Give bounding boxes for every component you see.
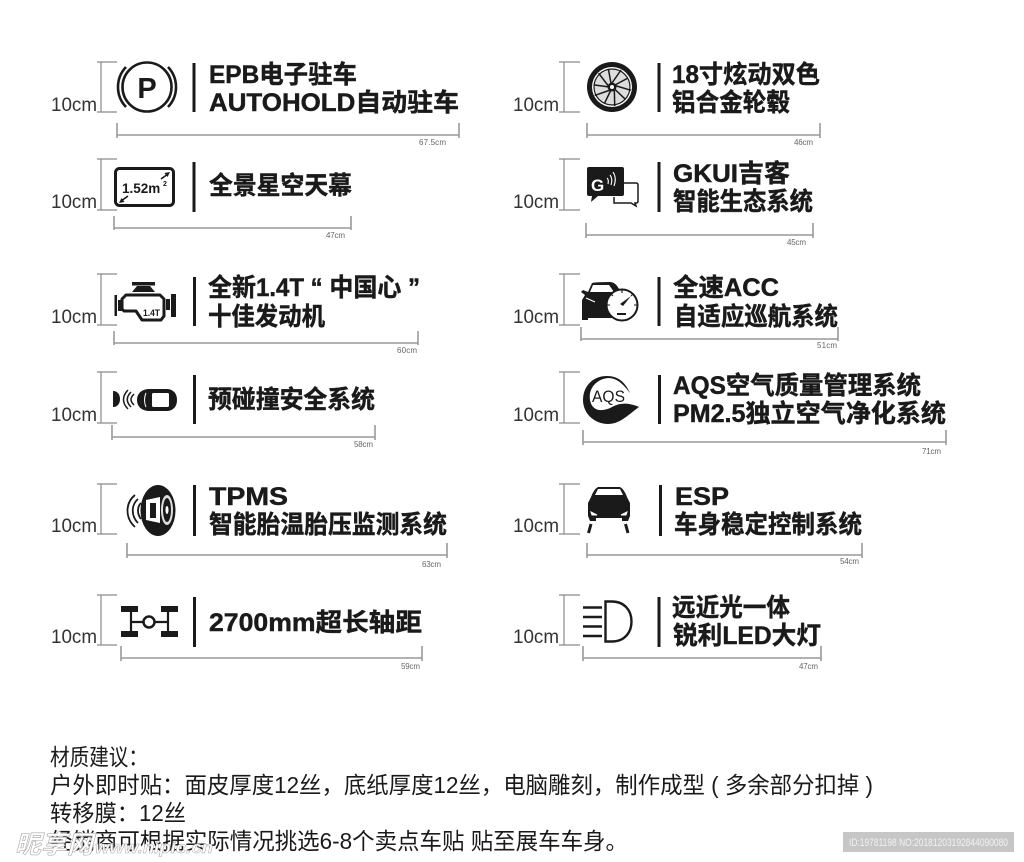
- text: EPB heading: EPB电子驻车: [209, 61, 357, 89]
- panel: ESP sticker: 10cm: [513, 515, 559, 537]
- panel: wheelbase sticker: 10cm: [51, 626, 97, 648]
- panel: TPMS sticker: 63cm: [422, 560, 441, 569]
- panel: GKUI sticker: 10cm: [513, 191, 559, 213]
- panel: pre-collision sticker: 10cm: [51, 404, 97, 426]
- panel: headlight sticker: 47cm: [799, 662, 818, 671]
- panel: EPB sticker: 67.5cm: [419, 138, 446, 147]
- icon: engine: 1.4T: [143, 308, 160, 318]
- text: AQS heading: PM2.5独立空气净化系统: [673, 400, 946, 428]
- panel: ESP sticker: [513, 483, 862, 566]
- watermark: site logo: 昵享网: [15, 831, 97, 859]
- panel: headlight sticker: [513, 594, 821, 671]
- text: ESP heading: 车身稳定控制系统: [674, 511, 862, 539]
- panel: panoramic sunroof sticker: 10cm: [51, 191, 97, 213]
- icon: car with collision radar: [113, 389, 177, 411]
- panel: ESP sticker: 54cm: [840, 557, 859, 566]
- text: TPMS heading: [209, 483, 447, 539]
- text block: material notes: 经销商可根据实际情况挑选6-8个卖点车贴 贴至展车车身。: [50, 828, 628, 854]
- watermark: site logo: www.nipic.cn: [95, 838, 213, 857]
- panel: wheelbase sticker: [51, 595, 422, 671]
- watermark: site logo: [15, 831, 213, 859]
- icon: parking brake: [118, 62, 176, 112]
- panel: TPMS sticker: 10cm: [51, 515, 97, 537]
- text: EPB heading: AUTOHOLD自动驻车: [209, 89, 459, 117]
- panel: 1.4T engine sticker: 10cm: [51, 306, 97, 328]
- text: ACC heading: 自适应巡航系统: [674, 302, 838, 331]
- icon: headlight: [583, 602, 632, 642]
- text: EPB heading: [209, 61, 459, 117]
- text: GKUI heading: [673, 159, 813, 216]
- text: wheel heading: 铝合金轮毂: [672, 89, 790, 117]
- text: wheel heading: 18寸炫动双色: [672, 61, 820, 89]
- icon: tire pressure: [128, 485, 176, 536]
- icon: parking brake: P: [137, 73, 157, 105]
- icon: AQS leaf: [583, 376, 639, 424]
- text: wheel heading: [672, 61, 820, 117]
- text: headlight heading: 锐利LED大灯: [673, 622, 821, 650]
- panel: 1.4T engine sticker: 60cm: [397, 346, 417, 355]
- icon: AQS leaf: AQS: [592, 387, 625, 406]
- text: TPMS heading: TPMS: [209, 483, 288, 511]
- panel: GKUI sticker: 45cm: [787, 238, 806, 247]
- text block: material notes: [50, 744, 873, 854]
- icon: alloy wheel: [587, 62, 637, 112]
- text: ACC heading: 全速ACC: [673, 274, 779, 302]
- icon: car and speedometer: [581, 282, 638, 320]
- text: GKUI heading: GKUI吉客: [673, 159, 790, 188]
- text: ESP heading: [674, 483, 862, 539]
- panel: 1.4T engine sticker: [51, 274, 420, 355]
- panel: EPB sticker: [51, 61, 459, 147]
- icon: chassis wheelbase: [121, 606, 178, 637]
- panel: 18 inch wheel sticker: 10cm: [513, 94, 559, 116]
- watermark: image id box: [843, 832, 1014, 852]
- text: pre-collision heading: 预碰撞安全系统: [208, 386, 375, 414]
- icon: sunroof area: 1.52m: [122, 181, 160, 196]
- panel: AQS sticker: 10cm: [513, 404, 559, 426]
- text block: material notes: 户外即时贴：面皮厚度12丝，底纸厚度12丝，电脑雕刻，制作成型 ( 多余部分扣掉 ): [50, 772, 873, 798]
- panel: pre-collision sticker: 58cm: [354, 440, 373, 449]
- panel: panoramic sunroof sticker: 47cm: [326, 231, 345, 240]
- panel: EPB sticker: 10cm: [51, 94, 97, 116]
- icon: car on road: [588, 487, 630, 533]
- icon: chat bubbles: [587, 167, 638, 206]
- text: TPMS heading: 智能胎温胎压监测系统: [209, 511, 447, 539]
- text: ESP heading: ESP: [675, 483, 729, 511]
- text: engine heading: [208, 274, 420, 331]
- text: engine heading: 全新1.4T “ 中国心 ”: [208, 274, 420, 302]
- text: wheelbase heading: 2700mm超长轴距: [209, 609, 422, 637]
- panel: AQS sticker: [513, 372, 946, 456]
- panel: 18 inch wheel sticker: [513, 61, 820, 147]
- panel: 18 inch wheel sticker: 46cm: [794, 138, 813, 147]
- panel: full speed ACC sticker: [513, 274, 838, 350]
- text: headlight heading: [672, 594, 821, 650]
- panel: full speed ACC sticker: 51cm: [817, 341, 837, 350]
- icon: chat bubbles: G: [591, 176, 604, 195]
- panel: panoramic sunroof sticker: [51, 159, 352, 240]
- panel: pre-collision sticker: [51, 372, 375, 449]
- panel: TPMS sticker: [51, 483, 447, 569]
- text: headlight heading: 远近光一体: [672, 594, 790, 622]
- panel: full speed ACC sticker: 10cm: [513, 306, 559, 328]
- panel: wheelbase sticker: 59cm: [401, 662, 420, 671]
- text: ACC heading: [673, 274, 838, 331]
- text: AQS heading: [673, 372, 946, 428]
- icon: engine: [114, 282, 176, 320]
- panel: GKUI sticker: [513, 159, 813, 247]
- text: AQS heading: AQS空气质量管理系统: [673, 372, 921, 400]
- panel: headlight sticker: 10cm: [513, 626, 559, 648]
- panel: AQS sticker: 71cm: [922, 447, 941, 456]
- icon: sunroof area: [116, 168, 174, 206]
- text block: material notes: 材质建议：: [50, 744, 148, 770]
- text block: material notes: 转移膜：12丝: [50, 800, 186, 826]
- icon: sunroof area: 2: [163, 181, 167, 188]
- text: GKUI heading: 智能生态系统: [673, 188, 813, 216]
- text: sunroof heading: 全景星空天幕: [209, 172, 352, 200]
- text: engine heading: 十佳发动机: [208, 303, 325, 331]
